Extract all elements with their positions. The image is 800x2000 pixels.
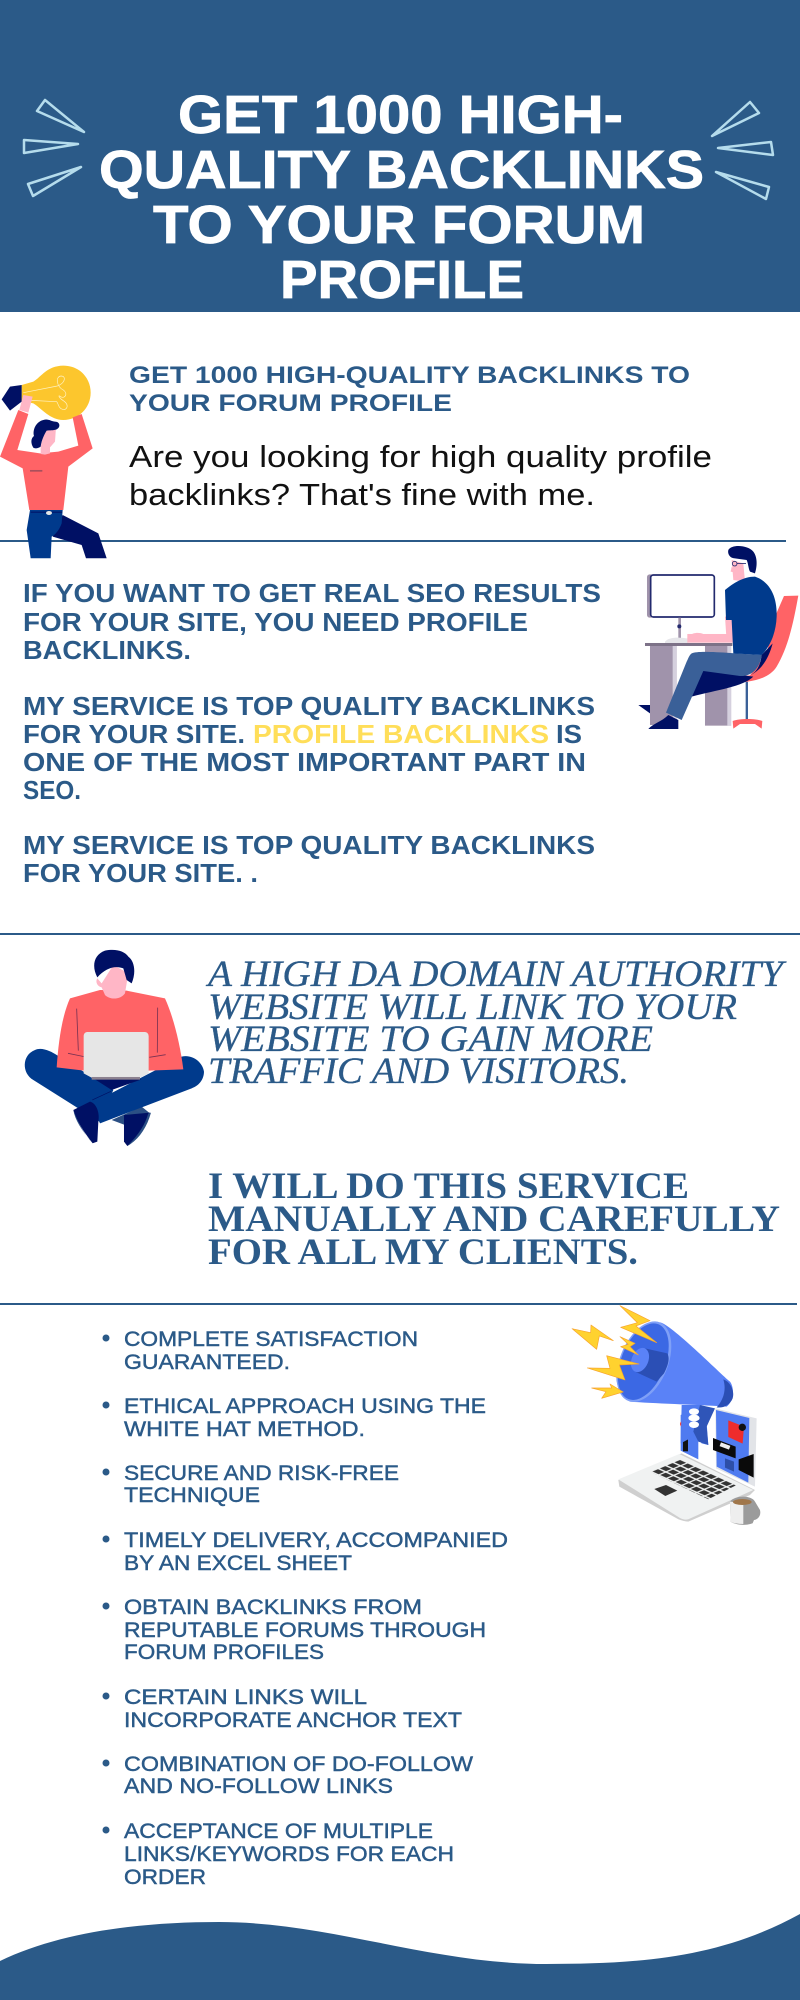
callout: bold serif statement: I WILL DO THIS SERVICE [208, 1166, 689, 1207]
icon: right sparkle burst [712, 102, 773, 199]
callout: bold serif statement [208, 1166, 780, 1273]
bullet list of service features: COMBINATION OF DO-FOLLOW [124, 1753, 473, 1776]
bullet list of service features: GUARANTEED. [124, 1351, 290, 1374]
service paragraph block: FOR YOUR SITE, YOU NEED PROFILE [23, 609, 528, 637]
bullet list of service features: ACCEPTANCE OF MULTIPLE [124, 1820, 433, 1843]
section heading: GET 1000 HIGH-QUALITY BACKLINKS TO [129, 362, 690, 389]
service paragraph block: SEO. [23, 777, 81, 805]
service paragraph block: PROFILE BACKLINKS [253, 721, 549, 749]
bullet list of service features: WHITE HAT METHOD. [124, 1418, 365, 1441]
title: TO YOUR FORUM [153, 195, 645, 255]
callout: italic serif statement: WEBSITE WILL LINK TO YOUR [208, 987, 737, 1028]
service paragraph block: FOR YOUR SITE. [23, 721, 245, 749]
bullet list of service features: ORDER [124, 1866, 206, 1889]
callout: bold serif statement: FOR ALL MY CLIENTS. [208, 1232, 638, 1273]
title: QUALITY BACKLINKS [99, 140, 704, 200]
service paragraph block: BACKLINKS. [23, 637, 191, 665]
icon: left sparkle burst [24, 100, 84, 196]
bullet list of service features [102, 1328, 508, 1889]
bullet list of service features: REPUTABLE FORUMS THROUGH [124, 1619, 486, 1642]
service paragraph block: FOR YOUR SITE. . [23, 860, 258, 888]
title: GET 1000 HIGH- [178, 85, 623, 145]
footer wave [0, 1914, 800, 2000]
service paragraph block: MY SERVICE IS TOP QUALITY BACKLINKS [23, 693, 595, 721]
section heading: YOUR FORUM PROFILE [129, 390, 452, 417]
icon: man holding light bulb [0, 366, 107, 558]
bullet list of service features: INCORPORATE ANCHOR TEXT [124, 1709, 462, 1732]
bullet list of service features: FORUM PROFILES [124, 1641, 324, 1664]
section heading [129, 362, 690, 417]
bullet list of service features: TIMELY DELIVERY, ACCOMPANIED [124, 1529, 508, 1552]
icon: man at desk with computer [638, 546, 798, 729]
bullet list of service features: TECHNIQUE [124, 1484, 260, 1507]
intro text: Are you looking for high quality profile [129, 439, 712, 474]
intro text [129, 439, 712, 512]
title: PROFILE [280, 250, 524, 310]
service paragraph block [23, 580, 601, 888]
callout: bold serif statement: MANUALLY AND CAREFULLY [208, 1199, 780, 1240]
bullet list of service features: OBTAIN BACKLINKS FROM [124, 1596, 422, 1619]
bullet list of service features: AND NO-FOLLOW LINKS [124, 1775, 393, 1798]
service paragraph block: MY SERVICE IS TOP QUALITY BACKLINKS [23, 832, 595, 860]
header banner [0, 0, 800, 312]
service paragraph block: IS [556, 721, 582, 749]
bullet list of service features: SECURE AND RISK-FREE [124, 1462, 399, 1485]
icon: cross-legged man with laptop [25, 950, 204, 1146]
bullet list of service features: LINKS/KEYWORDS FOR EACH [124, 1843, 454, 1866]
intro text: backlinks? That's fine with me. [129, 477, 595, 512]
service paragraph block: ONE OF THE MOST IMPORTANT PART IN [23, 749, 586, 777]
bullet list of service features: CERTAIN LINKS WILL [124, 1686, 367, 1709]
bullet list of service features: BY AN EXCEL SHEET [124, 1552, 352, 1575]
callout: italic serif statement [205, 954, 787, 1092]
callout: italic serif statement: WEBSITE TO GAIN MORE [208, 1019, 653, 1060]
service paragraph block: IF YOU WANT TO GET REAL SEO RESULTS [23, 580, 601, 608]
title [99, 85, 704, 310]
bullet list of service features: COMPLETE SATISFACTION [124, 1328, 418, 1351]
bullet list of service features: ETHICAL APPROACH USING THE [124, 1395, 486, 1418]
callout: italic serif statement: TRAFFIC AND VISITORS. [208, 1051, 629, 1092]
callout: italic serif statement: A HIGH DA DOMAIN AUTHORITY [205, 954, 787, 995]
icon: megaphone and laptop [572, 1306, 760, 1525]
